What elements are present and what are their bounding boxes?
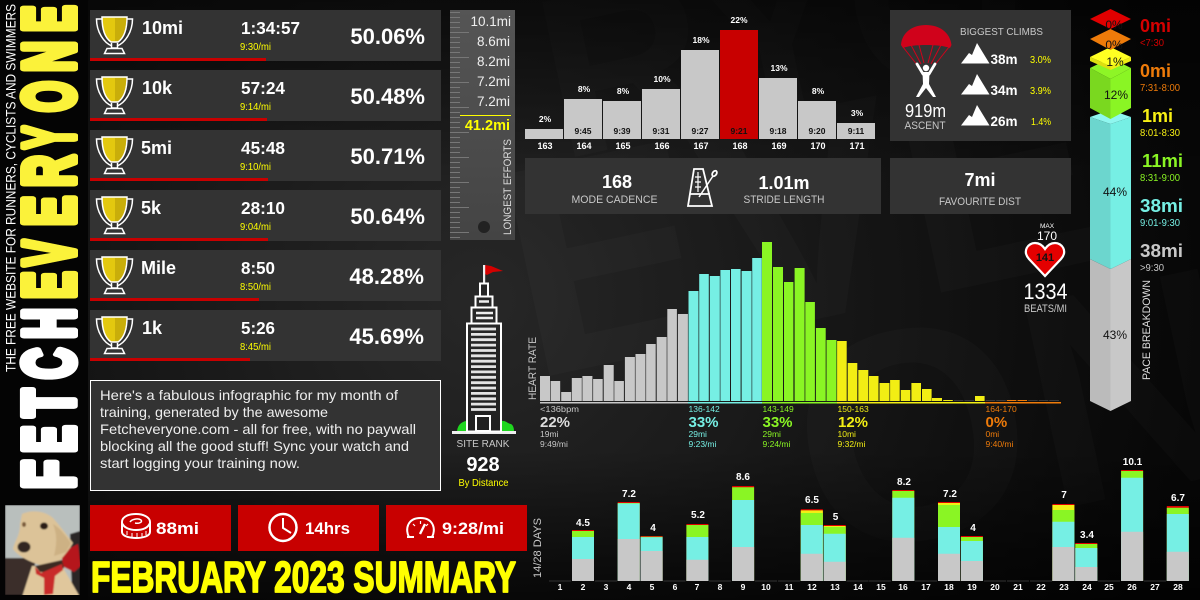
panel: personal bests	[90, 10, 441, 361]
zone: under 136bpm: 19mi	[540, 429, 559, 439]
day 26: 10.1	[1123, 457, 1143, 468]
logo word FETCH: H	[10, 308, 90, 339]
zone: 164-170: 0%	[986, 414, 1007, 431]
zone: 143-149	[762, 404, 794, 449]
day axis labels: 19	[967, 582, 977, 592]
best: 1k: 1k	[142, 318, 163, 338]
pace band 7:31-8:00: 7:31-8:00	[1140, 83, 1180, 94]
cadence paces: 9:21	[730, 126, 748, 136]
pace band 9:01-9:30	[1140, 196, 1183, 229]
cadence paces: 9:27	[691, 126, 709, 136]
day axis labels: 13	[830, 582, 840, 592]
site rank skyscraper: 928	[466, 454, 500, 476]
zone: under 136bpm: 22%	[540, 414, 570, 431]
cadence percentages: 2%	[539, 114, 552, 124]
climb 1: 38m	[990, 52, 1018, 67]
heart rate summary: 1334	[1024, 279, 1068, 304]
stat: total time	[238, 505, 379, 551]
best: 5k: 5k	[141, 198, 162, 218]
zone: under 136bpm: 9:49/mi	[540, 439, 568, 449]
best: 10mi: 10mi	[142, 18, 183, 38]
heart rate summary: MAX	[1040, 223, 1055, 230]
day axis labels: 22	[1036, 582, 1046, 592]
day axis labels: 16	[898, 582, 908, 592]
panel: cadence and stride: MODE CADENCE	[572, 194, 658, 206]
day axis labels: 26	[1127, 582, 1137, 592]
best: 10k: 57:24	[241, 78, 285, 98]
day axis labels: 4	[627, 582, 632, 592]
climb 2: 34m	[990, 83, 1018, 98]
zone: 136-142: 9:23/mi	[688, 439, 716, 449]
brand logo: FETCHEVERYONE vertical	[10, 6, 90, 489]
day 24: 3.4	[1080, 530, 1094, 541]
day 9	[732, 472, 754, 581]
day 13	[824, 512, 846, 581]
cadence percentages: 3%	[851, 108, 864, 118]
climb 1	[961, 43, 1051, 67]
panel: ascent and climbs	[890, 10, 1071, 141]
climb 3	[961, 105, 1051, 129]
icon: metronome	[688, 169, 718, 206]
day axis labels: 11	[784, 582, 794, 592]
best: 10k	[90, 70, 441, 121]
day axis labels: 3	[604, 582, 609, 592]
best: 5k: 9:04/mi	[240, 221, 271, 233]
icon: tape measure	[122, 514, 150, 538]
day 9: 8.6	[736, 472, 750, 483]
zone: 164-170	[986, 404, 1017, 449]
segment: 8:01-8:30: 1%	[1106, 55, 1124, 69]
cadence axis labels: 169	[771, 141, 787, 151]
logo word FETCH: F	[10, 460, 90, 489]
best: 10mi: 9:30/mi	[240, 41, 271, 53]
segment: 8:31-9:00	[1090, 58, 1131, 119]
best: 5k: 50.64%	[350, 204, 425, 229]
zone: 143-149: 143-149	[762, 404, 794, 414]
heart rate summary	[1024, 223, 1068, 315]
icon: heart	[1026, 243, 1064, 276]
zone: 143-149: 33%	[762, 414, 793, 431]
best: 1k	[90, 310, 441, 361]
segment: 8:01-8:30	[1090, 47, 1131, 70]
cadence paces	[574, 126, 865, 136]
zone: 136-142: 29mi	[688, 429, 707, 439]
cadence percentages: 18%	[692, 35, 710, 45]
pace band 8:01-8:30: 8:01-8:30	[1140, 128, 1180, 139]
day axis labels: 7	[695, 582, 700, 592]
icon: clock	[270, 514, 296, 541]
zone: 150-163: 12%	[838, 414, 868, 431]
panel: cadence and stride: STRIDE LENGTH	[744, 194, 825, 206]
best: Mile: 8:50/mi	[240, 281, 271, 293]
logo word EVERYONE: E	[10, 272, 90, 299]
segment: 7:31-8:00: 0%	[1105, 38, 1123, 52]
best: 10mi	[90, 10, 441, 61]
logo word EVERYONE: V	[10, 240, 90, 266]
day 7	[686, 510, 708, 581]
day axis labels: 25	[1104, 582, 1114, 592]
bars: 150-163	[837, 341, 985, 401]
segment: under 7:30: 0%	[1105, 18, 1123, 32]
day 23: 7	[1061, 490, 1067, 501]
text block: intro message: Here's a fabulous infographic for my month of	[100, 387, 398, 403]
segment: under 7:30	[1090, 9, 1131, 32]
logo word EVERYONE: E	[10, 196, 90, 226]
zone: 143-149: 29mi	[762, 429, 781, 439]
pace band 8:01-8:30	[1140, 106, 1180, 139]
zone: 164-170: 0mi	[986, 429, 999, 439]
day 18	[938, 489, 960, 581]
logo word EVERYONE: N	[10, 41, 90, 72]
bars: under 136bpm	[540, 309, 688, 401]
pace band over 9:30	[1140, 241, 1183, 274]
cadence axis labels: 166	[654, 141, 670, 151]
panel: longest efforts ruler: LONGEST EFFORTS	[502, 139, 514, 235]
segment: over 9:30: 43%	[1103, 328, 1127, 342]
panel: longest efforts ruler: 7.2mi	[477, 94, 510, 109]
cadence paces: 9:45	[574, 126, 592, 136]
climb 2	[961, 74, 1051, 98]
day axis labels: 5	[650, 582, 655, 592]
text block: intro message: start logging your training now.	[100, 455, 300, 471]
day 4	[618, 489, 640, 581]
day 13: 5	[833, 512, 839, 523]
logo word EVERYONE: O	[10, 81, 90, 112]
day axis labels: 2	[581, 582, 586, 592]
day axis labels: 8	[718, 582, 723, 592]
best: Mile: 8:50	[241, 258, 275, 278]
day 12	[801, 495, 823, 581]
bars: 136-142	[688, 258, 762, 401]
day axis labels: 18	[944, 582, 954, 592]
text block: intro message: training, generated by the awesome	[100, 404, 328, 420]
day 24	[1075, 530, 1097, 581]
photo: dog	[5, 505, 81, 597]
day 19: 4	[970, 523, 976, 534]
stat: total distance: 88mi	[156, 519, 199, 538]
pace band 8:31-9:00	[1140, 151, 1183, 184]
pace band under 7:30: 0mi	[1140, 16, 1171, 36]
panel: favourite distance: FAVOURITE DIST	[939, 196, 1021, 208]
text block: intro message	[90, 380, 440, 490]
logo word FETCH: T	[10, 389, 90, 417]
panel: longest efforts ruler: 41.2mi	[465, 118, 510, 134]
pace band 8:31-9:00: 11mi	[1142, 151, 1183, 171]
best: 10k: 10k	[142, 78, 173, 98]
logo word FETCH	[10, 308, 90, 489]
heart rate summary: 141	[1036, 252, 1054, 264]
cadence percentages: 8%	[812, 86, 825, 96]
panel: longest efforts ruler: 10.1mi	[470, 14, 511, 29]
cadence percentages: 13%	[770, 63, 788, 73]
panel: ascent and climbs: 919m	[905, 101, 946, 121]
cadence percentages: 8%	[578, 84, 591, 94]
logo word EVERYONE: Y	[10, 126, 90, 149]
bars: 143-149	[762, 242, 836, 401]
pace band 8:31-9:00: 8:31-9:00	[1140, 173, 1180, 184]
logo word FETCH: E	[10, 426, 90, 453]
cadence axis labels: 171	[849, 141, 865, 151]
logo word FETCH: C	[10, 348, 90, 379]
zone: 136-142	[688, 404, 720, 449]
segment: 9:01-9:30	[1090, 110, 1131, 269]
pace band 7:31-8:00	[1140, 61, 1180, 94]
pace band 8:01-8:30: 1mi	[1142, 106, 1173, 126]
best: 5mi: 5mi	[141, 138, 172, 158]
pace breakdown caption: PACE BREAKDOWN	[1141, 280, 1153, 380]
cadence percentages: 22%	[730, 15, 748, 25]
climb 1: 3.0%	[1030, 55, 1051, 66]
climb 2: 3.9%	[1030, 86, 1051, 97]
cadence paces: 9:18	[769, 126, 787, 136]
stat: average pace: 9:28/mi	[442, 519, 504, 538]
best: Mile	[90, 250, 441, 301]
pace band under 7:30	[1140, 16, 1171, 49]
best: 10mi: 50.06%	[350, 24, 425, 49]
chart: daily distance	[532, 457, 1189, 592]
site rank skyscraper: SITE RANK	[456, 438, 510, 450]
stat: total distance	[90, 505, 231, 551]
logo word EVERYONE: R	[10, 155, 90, 187]
day axis labels: 1	[558, 582, 563, 592]
stat: total time: 14hrs	[305, 519, 350, 538]
best: 10mi: 1:34:57	[241, 18, 300, 38]
day 23	[1052, 490, 1074, 581]
climb 3: 1.4%	[1031, 117, 1051, 128]
day 28: 6.7	[1171, 493, 1185, 504]
cadence axis labels: 164	[576, 141, 592, 151]
cadence axis labels	[537, 141, 865, 151]
pace band under 7:30: <7:30	[1140, 38, 1164, 49]
panel: favourite distance	[890, 158, 1071, 214]
zone: 164-170: 164-170	[986, 404, 1017, 414]
zone: 150-163: 150-163	[838, 404, 869, 414]
day axis labels: 6	[673, 582, 678, 592]
climb 3: 26m	[990, 114, 1018, 129]
pace band 9:01-9:30: 38mi	[1140, 196, 1183, 216]
cadence percentages: 10%	[653, 74, 671, 84]
cadence axis labels: 163	[537, 141, 553, 151]
heart rate summary: 170	[1037, 229, 1057, 243]
panel: longest efforts ruler: 7.2mi	[477, 74, 510, 89]
best: 5mi: 9:10/mi	[240, 161, 271, 173]
best: 10k: 50.48%	[350, 84, 425, 109]
zone: 164-170: 9:40/mi	[986, 439, 1013, 449]
site rank skyscraper: By Distance	[458, 477, 509, 489]
panel: cadence and stride	[525, 158, 881, 214]
icon: skyscraper	[452, 265, 516, 434]
chart: cadence histogram	[525, 15, 875, 151]
days axis caption: 14/28 DAYS	[532, 518, 544, 578]
day axis labels	[558, 582, 1183, 592]
pace breakdown legend	[1140, 16, 1183, 380]
day 16: 8.2	[897, 477, 911, 488]
day axis labels: 12	[807, 582, 817, 592]
best: 5mi: 45:48	[241, 138, 285, 158]
pace band over 9:30: 38mi	[1140, 241, 1183, 261]
day 18: 7.2	[943, 489, 957, 500]
day axis labels: 17	[921, 582, 931, 592]
day axis labels: 28	[1173, 582, 1183, 592]
cadence bars	[525, 30, 875, 139]
cadence axis labels: 170	[810, 141, 826, 151]
zone: 150-163: 10mi	[838, 429, 856, 439]
icon: parachutist	[901, 25, 952, 97]
day 19	[961, 523, 983, 581]
panel: cadence and stride: 1.01m	[758, 173, 810, 193]
segment: 7:31-8:00	[1090, 29, 1131, 52]
stat: average pace	[386, 505, 527, 551]
zone: under 136bpm: <136bpm	[540, 405, 579, 414]
zone: 143-149: 9:24/mi	[762, 439, 790, 449]
panel: cadence and stride: 168	[602, 172, 632, 192]
zone: under 136bpm	[540, 405, 579, 449]
day axis labels: 10	[761, 582, 771, 592]
panel: longest efforts ruler: 8.2mi	[477, 54, 510, 69]
heart rate summary: BEATS/MI	[1024, 303, 1067, 315]
pace band 7:31-8:00: 0mi	[1140, 61, 1171, 81]
day axis labels: 21	[1013, 582, 1023, 592]
best: 5mi: 50.71%	[350, 144, 425, 169]
cadence paces: 9:20	[808, 126, 826, 136]
cadence percentages	[539, 15, 864, 124]
day axis labels: 9	[741, 582, 746, 592]
chart: pace breakdown column	[1090, 9, 1131, 411]
cadence paces: 9:39	[613, 126, 631, 136]
best: 1k: 8:45/mi	[240, 341, 271, 353]
day 2: 4.5	[576, 518, 590, 529]
segment: over 9:30	[1090, 259, 1131, 411]
zone: 150-163	[838, 404, 869, 449]
day 5	[641, 523, 663, 581]
best: Mile: Mile	[141, 258, 176, 278]
baseline	[540, 402, 1061, 404]
best: 10k: 9:14/mi	[240, 101, 271, 113]
day 5: 4	[650, 523, 656, 534]
pace band over 9:30: >9:30	[1140, 263, 1164, 274]
panel: favourite distance: 7mi	[964, 170, 996, 190]
segment: 8:31-9:00: 12%	[1104, 88, 1128, 102]
bars: 164-170	[1007, 400, 1027, 401]
cadence percentages: 8%	[617, 86, 630, 96]
panel: ascent and climbs: ASCENT	[904, 120, 946, 132]
cadence axis labels: 165	[615, 141, 631, 151]
day 7: 5.2	[691, 510, 705, 521]
best: 1k: 5:26	[241, 318, 275, 338]
cadence paces: 9:31	[652, 126, 670, 136]
day 28	[1167, 493, 1189, 581]
cadence axis labels: 167	[693, 141, 709, 151]
panel: ascent and climbs: BIGGEST CLIMBS	[960, 27, 1043, 38]
best: 5k: 28:10	[241, 198, 285, 218]
day axis labels: 15	[876, 582, 886, 592]
zone: 136-142: 33%	[688, 414, 719, 431]
day axis labels: 23	[1059, 582, 1069, 592]
logo word EVERYONE	[10, 6, 90, 299]
best: Mile: 48.28%	[349, 264, 424, 289]
text block: intro message: blocking all the good stuff! Sync your watch and	[100, 438, 409, 454]
pace band 9:01-9:30: 9:01-9:30	[1140, 218, 1180, 229]
zone: 136-142: 136-142	[688, 404, 720, 414]
panel: longest efforts ruler: 8.6mi	[477, 34, 510, 49]
best: 5mi	[90, 130, 441, 181]
best: 1k: 45.69%	[349, 324, 424, 349]
cadence paces: 9:11	[848, 126, 865, 136]
panel: longest efforts ruler	[450, 10, 515, 240]
icon: speedometer	[407, 518, 434, 537]
zone: 150-163: 9:32/mi	[838, 439, 865, 449]
day 16	[892, 477, 914, 581]
rest-day baselines	[549, 580, 1166, 582]
heart rate axis label: HEART RATE	[527, 337, 539, 400]
site rank skyscraper	[452, 265, 516, 489]
day axis labels: 24	[1082, 582, 1092, 592]
day axis labels: 27	[1150, 582, 1160, 592]
day 2	[572, 518, 594, 581]
segment: 9:01-9:30: 44%	[1103, 185, 1127, 199]
best: 5k	[90, 190, 441, 241]
day axis labels: 14	[853, 582, 863, 592]
day 12: 6.5	[805, 495, 819, 506]
day 26	[1121, 457, 1143, 581]
day axis labels: 20	[990, 582, 1000, 592]
cadence axis labels: 168	[732, 141, 748, 151]
text block: intro message: Fetcheveryone.com - all for free, with no paywall	[100, 421, 416, 437]
day 4: 7.2	[622, 489, 636, 500]
chart: heart rate histogram	[527, 242, 1061, 449]
